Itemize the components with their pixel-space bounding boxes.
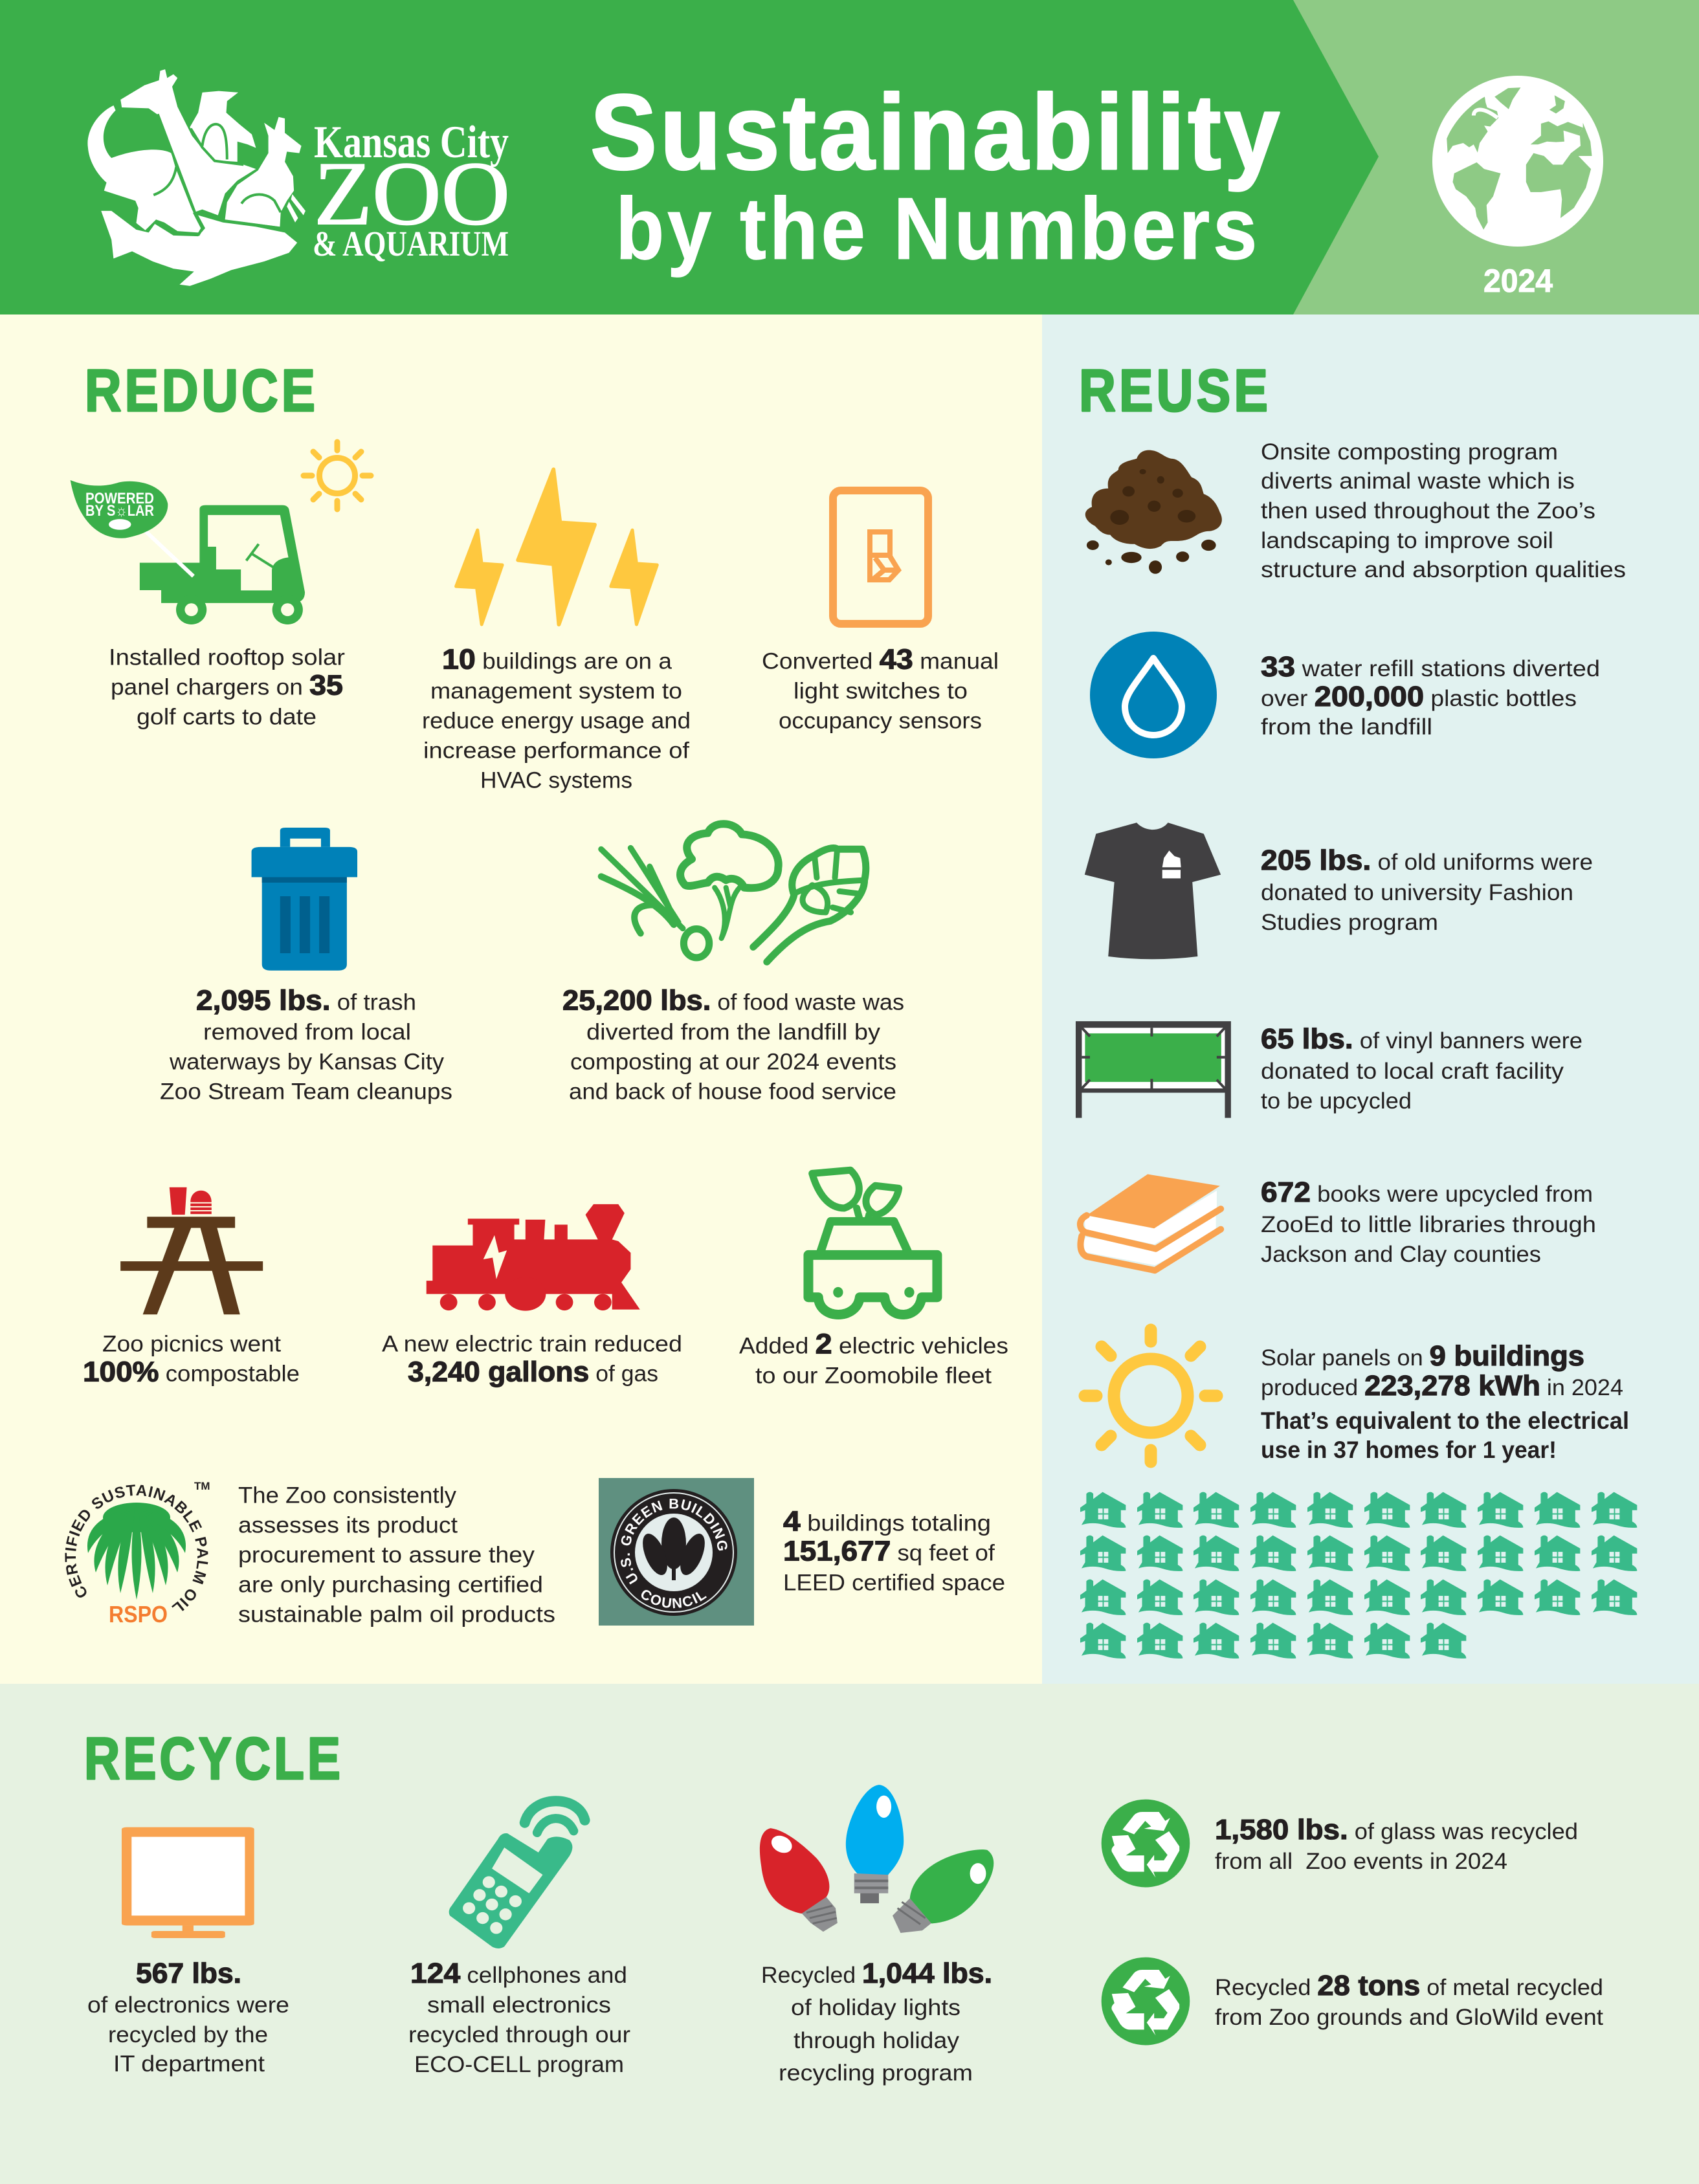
text: water stations: 33 water refill stations diverted	[1261, 651, 1600, 683]
text: cellphones: 124 cellphones and	[410, 1958, 627, 1989]
RSPO wordmark: RSPO	[109, 1601, 168, 1627]
cart body	[140, 505, 305, 603]
text: palm oil: are only purchasing certified	[238, 1572, 543, 1597]
text: compost: structure and absorption qualities	[1261, 557, 1626, 582]
text: electric vehicles	[739, 1328, 1008, 1389]
logo text and aquarium: & AQUARIUM	[313, 224, 509, 263]
text: books: ZooEd to little libraries through	[1261, 1212, 1596, 1237]
text: electronics: recycled by the	[108, 2022, 268, 2047]
text: books: 672 books were upcycled from	[1261, 1176, 1593, 1208]
palm fronds	[87, 1503, 186, 1600]
icon: books	[1080, 1175, 1221, 1270]
heading: reduce: REDUCE	[85, 358, 318, 424]
icon: large sun	[1085, 1330, 1217, 1462]
text: electronics: 567 lbs.	[136, 1958, 241, 1989]
icon: compost pile	[1085, 450, 1222, 574]
text: LEED	[783, 1505, 1005, 1596]
title	[590, 72, 1283, 278]
text: glass: 1,580 lbs. of glass was recycled	[1215, 1814, 1578, 1846]
text: uniforms	[1261, 844, 1593, 935]
icon: globe	[1432, 76, 1603, 247]
text: water stations: over 200,000 plastic bottles	[1261, 681, 1577, 712]
badge text: POWERED	[85, 490, 154, 507]
text: cellphones: small electronics	[427, 1992, 611, 2018]
text: palm oil: procurement to assure they	[238, 1543, 535, 1567]
badge text line 2: BY S☼LAR	[85, 502, 154, 520]
text: water stations: from the landfill	[1261, 714, 1432, 740]
text: electronics: of electronics were	[87, 1992, 289, 2018]
text: holiday lights: recycling program	[779, 2060, 973, 2086]
text: uniforms: 205 lbs. of old uniforms were	[1261, 844, 1593, 876]
text: holiday lights	[761, 1958, 992, 2086]
text: uniforms: donated to university Fashion	[1261, 880, 1573, 905]
text: electric train	[382, 1332, 682, 1387]
icon: vinyl banner	[1076, 1021, 1231, 1118]
icon: recycle symbol glass	[1102, 1800, 1190, 1887]
text: buildings management: 10 buildings are on a	[442, 643, 672, 676]
text: buildings management: reduce energy usage and	[422, 708, 691, 734]
text: buildings management: increase performance of	[423, 738, 689, 764]
text: banners: to be upcycled	[1261, 1088, 1412, 1114]
text: trash removed: removed from local	[203, 1020, 411, 1044]
trademark: TM	[194, 1480, 210, 1492]
text: compost: landscaping to improve soil	[1261, 528, 1553, 553]
ring text: CERTIFIED SUSTAINABLE PALM OIL	[65, 1484, 208, 1611]
icon: electric train	[427, 1204, 640, 1311]
icon: cell phone	[449, 1801, 585, 1948]
text: golf carts: golf carts to date	[137, 704, 316, 730]
council oak leaves	[638, 1517, 710, 1580]
text: metal: from Zoo grounds and GloWild event	[1215, 2005, 1603, 2030]
logo: Kansas City Zoo and Aquarium	[87, 69, 510, 286]
logo: US Green Building Council	[599, 1478, 754, 1626]
text: banners: 65 lbs. of vinyl banners were	[1261, 1023, 1582, 1055]
text: trash removed: Zoo Stream Team cleanups	[160, 1079, 452, 1104]
text: palm oil: The Zoo consistently	[238, 1483, 457, 1508]
icon: holiday lights	[760, 1785, 994, 1933]
text: books	[1261, 1176, 1596, 1267]
text: solar panels: produced 223,278 kWh in 2024	[1261, 1370, 1623, 1402]
text: banners	[1261, 1023, 1582, 1114]
text: trash removed: 2,095 lbs. of trash	[196, 985, 416, 1016]
text: cellphones	[408, 1958, 630, 2077]
text: buildings management: HVAC systems	[480, 767, 632, 793]
text: cellphones: recycled through our	[408, 2022, 630, 2047]
text: holiday lights: through holiday	[794, 2028, 960, 2053]
icon: electric car with leaves	[808, 1170, 937, 1314]
text: compost: then used throughout the Zoo’s	[1261, 498, 1595, 524]
text: electric vehicles: to our Zoomobile fleet	[755, 1363, 992, 1389]
text: uniforms: Studies program	[1261, 910, 1438, 935]
text: electronics: IT department	[113, 2051, 265, 2077]
text: food waste: 25,200 lbs. of food waste was	[562, 985, 904, 1016]
text: picnics: 100% compostable	[83, 1356, 300, 1387]
text: light switches: occupancy sensors	[779, 708, 982, 734]
icon grid: 37 homes	[1080, 1492, 1637, 1659]
text: glass: from all Zoo events in 2024	[1215, 1849, 1507, 1874]
text: books: Jackson and Clay counties	[1261, 1242, 1541, 1267]
text: banners: donated to local craft facility	[1261, 1059, 1564, 1084]
text: light switches: Converted 43 manual	[762, 643, 999, 676]
text: LEED: 4 buildings totaling	[783, 1505, 991, 1538]
text: metal: Recycled 28 tons of metal recycled	[1215, 1970, 1603, 2002]
panel: reduce	[0, 314, 1042, 1684]
icon: small sun	[304, 442, 371, 509]
text: light switches: light switches to	[794, 678, 968, 704]
text: electric vehicles: Added 2 electric vehicles	[739, 1328, 1008, 1360]
panel: header	[0, 0, 1699, 314]
service mark: SM	[123, 254, 135, 263]
text: solar panels	[1261, 1340, 1629, 1463]
icon: light switch	[833, 491, 928, 624]
panel: recycle	[0, 1684, 1699, 2184]
text: trash removed: waterways by Kansas City	[169, 1050, 445, 1074]
text: LEED: 151,677 sq feet of	[783, 1535, 995, 1567]
text: electric train: 3,240 gallons of gas	[408, 1356, 658, 1387]
text: metal	[1215, 1970, 1603, 2030]
text: palm oil: sustainable palm oil products	[238, 1602, 555, 1627]
icon: t-shirt	[1085, 822, 1221, 959]
panel: reuse	[1042, 314, 1699, 1684]
text: compost: Onsite composting program	[1261, 439, 1558, 465]
text: cellphones: ECO-CELL program	[414, 2052, 624, 2077]
heading: recycle: RECYCLE	[84, 1726, 344, 1792]
ring text top: U.S. GREEN BUILDING	[621, 1499, 727, 1584]
text: compost: diverts animal waste which is	[1261, 469, 1575, 494]
icon: water drop	[1090, 632, 1217, 758]
logo text ZOO: ZOO	[314, 144, 510, 244]
text: compost	[1261, 439, 1626, 582]
text: palm oil: assesses its product	[238, 1513, 458, 1538]
text: light switches	[762, 643, 999, 734]
text: solar panels: Solar panels on 9 buildings	[1261, 1340, 1584, 1372]
text: trash removed	[160, 985, 452, 1104]
heading: reuse: REUSE	[1079, 358, 1271, 424]
text: water stations	[1261, 651, 1600, 740]
year label: 2024	[1483, 263, 1553, 299]
text: golf carts	[109, 645, 345, 730]
title line 1: Sustainability	[590, 72, 1283, 192]
text: food waste: composting at our 2024 events	[570, 1050, 896, 1074]
leaf badge	[71, 480, 168, 538]
icon: picnic table	[120, 1187, 263, 1314]
logo: RSPO	[65, 1480, 210, 1627]
header arrow banner	[0, 0, 1379, 314]
text: buildings management: management system to	[430, 678, 682, 704]
text: electronics	[87, 1958, 289, 2077]
icon: lightning bolts	[456, 469, 657, 624]
text: holiday lights: Recycled 1,044 lbs.	[761, 1958, 992, 1989]
ring text bottom: COUNCIL	[641, 1590, 707, 1609]
text: food waste: diverted from the landfill by	[586, 1020, 881, 1044]
icon: recycle symbol metal	[1102, 1958, 1190, 2045]
text: food waste: and back of house food service	[569, 1079, 896, 1104]
text: electric train: A new electric train reduced	[382, 1332, 682, 1356]
icon: trash can	[252, 828, 357, 971]
text: glass	[1215, 1814, 1578, 1874]
text: picnics: Zoo picnics went	[102, 1332, 281, 1356]
text: palm oil	[238, 1483, 555, 1627]
title line 2: by the Numbers	[616, 179, 1260, 278]
text: golf carts: Installed rooftop solar	[109, 645, 345, 670]
text: LEED: LEED certified space	[783, 1570, 1005, 1596]
text: golf carts: panel chargers on 35	[111, 669, 343, 701]
text: solar panels: That’s equivalent to the electrical	[1261, 1407, 1629, 1434]
text: picnics	[83, 1332, 300, 1387]
icon: monitor	[122, 1827, 254, 1938]
text: holiday lights: of holiday lights	[791, 1995, 961, 2020]
text: buildings management	[422, 643, 691, 793]
icon: vegetables	[601, 824, 866, 962]
icon: golf cart with solar leaf	[71, 442, 371, 624]
logo animals	[87, 69, 305, 286]
text: food waste	[562, 985, 904, 1104]
logo text Kansas City: Kansas City	[314, 117, 509, 168]
text: solar panels: use in 37 homes for 1 year!	[1261, 1437, 1557, 1463]
